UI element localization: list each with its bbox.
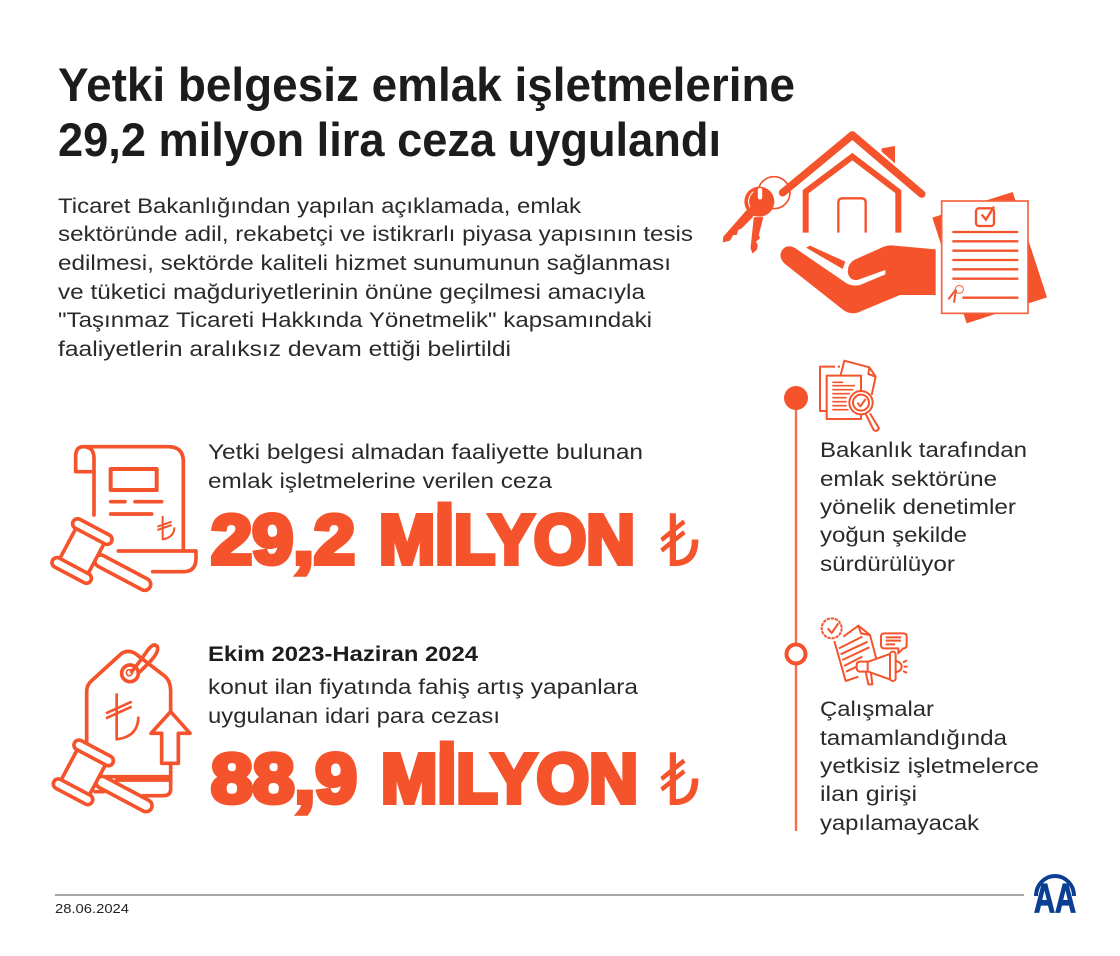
penalty description: konut ilan fiyatında fahiş artış yapanlara [208,674,639,699]
completion text: tamamlandığında [820,725,1008,750]
date: 28.06.2024 [55,901,129,916]
lira symbol: ₺ [660,738,700,822]
timeline dot: filled [784,386,808,410]
inspections text: sürdürülüyor [820,551,955,576]
icon: price tag with arrow and gavel [52,645,190,832]
intro text block: ve tüketici mağduriyetlerinin önüne geçilmesi amacıyla [58,279,646,304]
penalty description [208,674,639,728]
intro text block: sektöründe adil, rekabetçi ve istikrarlı piyasa yapısının tesis [58,221,693,246]
completion text: yetkisiz işletmelerce [820,753,1039,778]
title [58,58,795,166]
intro text block: edilmesi, sektörde kaliteli hizmet sunumunun sağlanması [58,250,671,275]
panel: listing price fine [52,641,700,832]
completion text [820,696,1039,835]
footer rule [55,894,1024,896]
inspections text [820,437,1027,576]
fine description: Yetki belgesi almadan faaliyette bulunan [208,439,643,464]
completion text: ilan girişi [820,781,917,806]
lira symbol: ₺ [660,499,700,583]
title: 29,2 milyon lira ceza uygulandı [58,113,721,166]
big number: 88,9 milyon: 88,9 [211,740,357,818]
icon: document with badge, megaphone and speech bubble [822,618,908,684]
panel: unlicensed business fine [50,439,700,611]
completion text: Çalışmalar [820,696,934,721]
inspections text: Bakanlık tarafından [820,437,1027,462]
intro text block: Ticaret Bakanlığından yapılan açıklamada, emlak [58,193,581,218]
inspections text: yönelik denetimler [820,494,1016,519]
penalty description: uygulanan idari para cezası [208,703,500,728]
fine description: emlak işletmelerine verilen ceza [208,468,553,493]
icon: documents with magnifier [820,361,879,431]
intro text block: "Taşınmaz Ticareti Hakkında Yönetmelik" kapsamındaki [58,307,652,332]
period label: Ekim 2023-Haziran 2024 [208,641,478,666]
intro text block: faaliyetlerin aralıksız devam ettiği belirtildi [58,336,511,361]
big number: 88,9 milyon: MİLYON [381,740,638,818]
big number: 29,2 milyon: MİLYON [379,500,635,578]
big number: 29,2 milyon: 29,2 [211,500,355,578]
timeline [784,386,808,831]
title: Yetki belgesiz emlak işletmelerine [58,58,795,111]
icon: back sheet of paper [932,192,1047,323]
icon: key ring and keys [723,177,790,254]
intro text block [58,193,693,361]
icon: house roof and walls [783,135,922,233]
inspections text: yoğun şekilde [820,522,967,547]
big number: 88,9 milyon [211,740,638,818]
fine description [208,439,643,493]
inspections text: emlak sektörüne [820,466,997,491]
logo: AA: AA [1034,875,1076,921]
icon: house in hand with keys and document [723,135,1047,323]
icon: scroll with gavel [50,447,196,611]
icon: open hand [780,245,936,313]
icon: document [942,201,1028,313]
timeline dot: ring [786,644,806,664]
big number: 29,2 milyon [211,500,635,578]
completion text: yapılamayacak [820,810,979,835]
